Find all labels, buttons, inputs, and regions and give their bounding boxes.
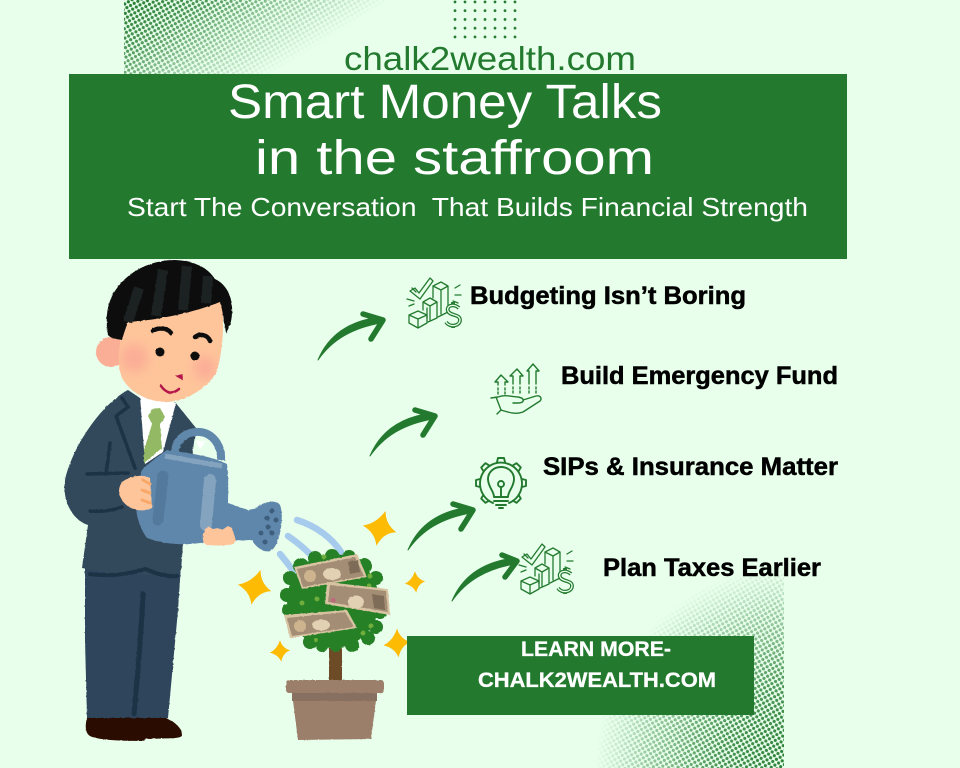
title banner (69, 74, 847, 259)
spout rose (253, 502, 282, 551)
icon: budget chart (407, 278, 461, 328)
water streams (280, 520, 341, 571)
icon: hand with rising arrows (491, 364, 541, 414)
trousers (85, 565, 181, 718)
website name: chalk2wealth.com (344, 40, 636, 77)
arrow 1 (318, 314, 383, 360)
foliage (280, 549, 387, 652)
call to action (407, 636, 754, 715)
sparkles (233, 506, 425, 662)
jacket (64, 390, 196, 575)
call to action: CHALK2WEALTH.COM (478, 669, 716, 692)
head (96, 337, 126, 367)
illustration: man watering (64, 260, 282, 741)
trunk (329, 648, 342, 682)
call to action: LEARN MORE- (521, 638, 671, 661)
banknotes (294, 554, 367, 589)
icon: lightbulb gear (476, 458, 526, 508)
face features (153, 329, 210, 341)
shoes (86, 718, 182, 741)
arrow 4 (452, 555, 517, 601)
title (228, 76, 662, 185)
title: in the staffroom (255, 132, 654, 185)
arrow 3 (408, 504, 473, 550)
pot (292, 693, 377, 740)
arrow 2 (370, 410, 435, 456)
halftone: top left (124, 0, 384, 74)
item: taxes: Plan Taxes Earlier (603, 554, 821, 582)
hands (119, 476, 152, 510)
icon: tax chart (519, 544, 573, 594)
item: budgeting: Budgeting Isn’t Boring (470, 282, 746, 310)
blush (120, 344, 216, 380)
subtitle: Start The Conversation That Builds Financial Strength (127, 192, 808, 222)
item: emergency fund: Build Emergency Fund (561, 362, 838, 390)
item: SIPs: SIPs & Insurance Matter (543, 453, 838, 481)
hair (107, 260, 232, 340)
title: Smart Money Talks (228, 76, 662, 129)
shirt and tie (140, 396, 176, 464)
watering can (175, 432, 221, 460)
money tree (280, 549, 390, 740)
halftone: bottom right (590, 560, 784, 768)
dot grid (450, 0, 520, 40)
